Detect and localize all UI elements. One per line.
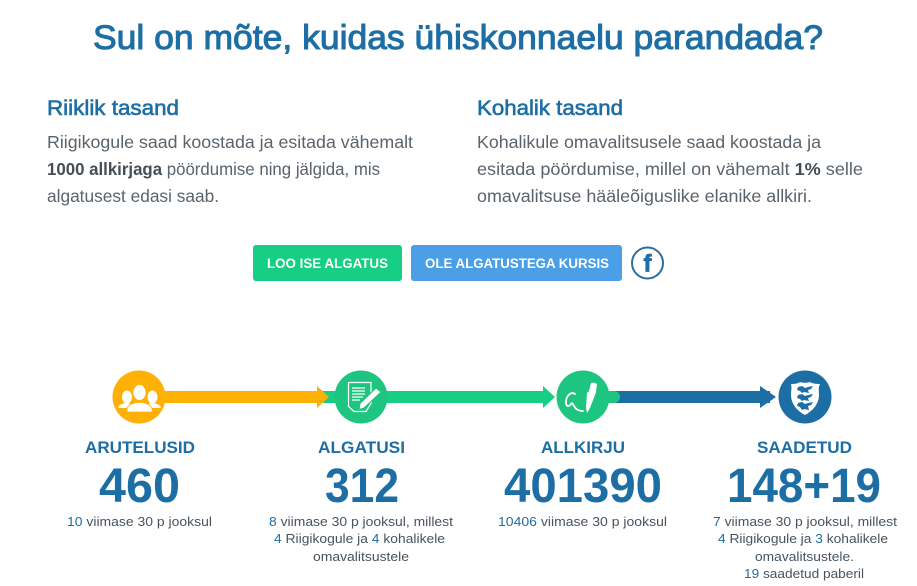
button: follow initiatives (411, 245, 622, 281)
stat: initiatives (269, 438, 453, 564)
stat: discussions (67, 438, 212, 529)
icon: discussions people (112, 370, 166, 424)
icon: signature and pen (556, 370, 610, 424)
stat: initiatives: 8 viimase 30 p jooksul, millest (269, 514, 453, 529)
stat: sent: omavalitsustele. (755, 549, 854, 564)
stat: sent: 4 Riigikogule ja 3 kohalikele (718, 531, 888, 546)
heading: Kohalik tasand: Kohalik tasand (477, 97, 623, 120)
stat: discussions: 10 viimase 30 p jooksul (67, 514, 212, 529)
button: create initiative (253, 245, 402, 281)
icon: document and pen (334, 370, 388, 424)
arrow: initiatives to signatures (322, 386, 620, 408)
arrow: discussions to initiatives (150, 386, 329, 408)
button: create initiative: LOO ISE ALGATUS (267, 256, 388, 271)
stat: discussions: ARUTELUSID (85, 438, 195, 457)
text block: local level description (477, 132, 863, 206)
text block: national level description: Riigikogule saad koostada ja esitada vähemalt (47, 132, 413, 152)
icon: facebook (632, 248, 663, 278)
stat: sent: SAADETUD (757, 438, 852, 457)
stat: sent: 148+19 (727, 460, 881, 513)
stat: signatures: ALLKIRJU (541, 438, 625, 457)
title: Sul on mõte, kuidas ühiskonnaelu parandada? (93, 19, 823, 57)
text block: national level description (47, 132, 413, 206)
text block: national level description: 1000 allkirjaga pöördumise ning jälgida, mis (47, 159, 380, 179)
text block: local level description: esitada pöördumise, millel on vähemalt 1% selle (477, 159, 863, 179)
panel: local level (477, 97, 863, 206)
heading: Riiklik tasand: Riiklik tasand (47, 97, 179, 120)
text block: national level description: algatusest edasi saab. (47, 186, 219, 206)
stat: sent (713, 438, 897, 581)
stat: initiatives: omavalitsustele (313, 549, 409, 564)
arrow: signatures to sent (612, 386, 776, 408)
stat: sent: 19 saadetud paberil (744, 566, 864, 581)
stat: signatures (498, 438, 667, 529)
stat: discussions: 460 (99, 460, 180, 513)
button: follow initiatives: OLE ALGATUSTEGA KURSIS (425, 256, 609, 271)
stat: initiatives: ALGATUSI (318, 438, 405, 457)
stat: signatures: 401390 (504, 460, 662, 513)
text block: local level description: omavalitsuse hääleõiguslike elanike allkiri. (477, 186, 812, 206)
panel: national level (47, 97, 413, 206)
text block: local level description: Kohalikule omavalitsusele saad koostada ja (477, 132, 821, 152)
stat: initiatives: 4 Riigikogule ja 4 kohalikele (274, 531, 445, 546)
stat: initiatives: 312 (325, 460, 399, 513)
icon: facebook: f (644, 250, 652, 278)
stat: signatures: 10406 viimase 30 p jooksul (498, 514, 667, 529)
stat: sent: 7 viimase 30 p jooksul, millest (713, 514, 897, 529)
icon: Estonian coat of arms (778, 370, 832, 424)
